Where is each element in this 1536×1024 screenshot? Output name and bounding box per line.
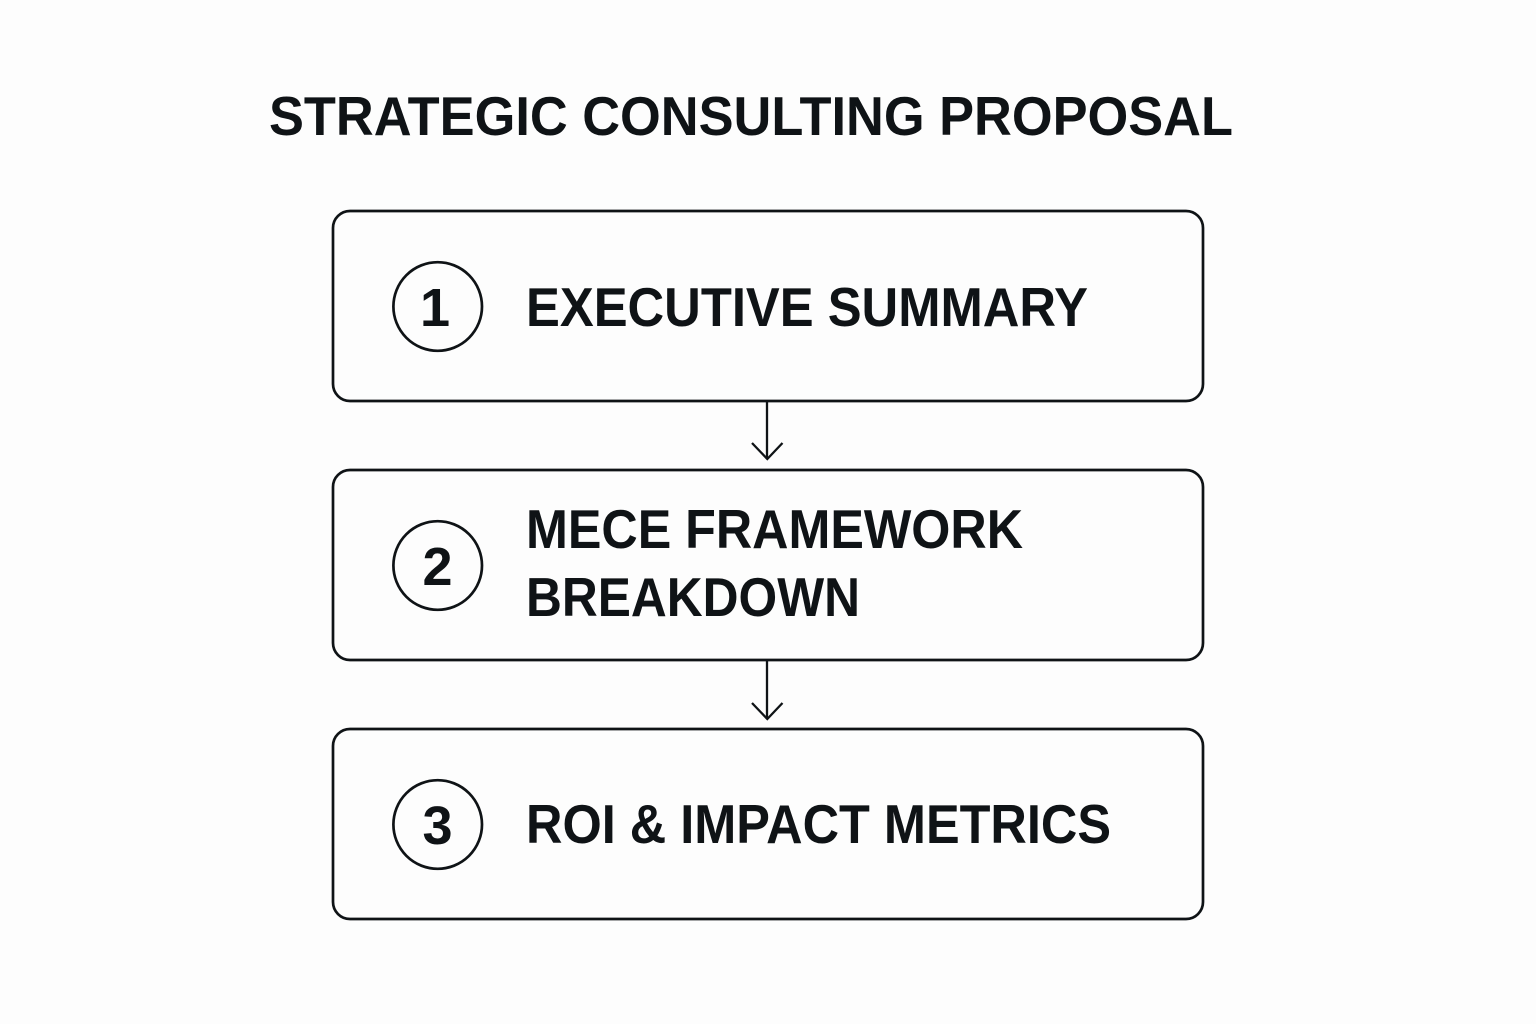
panel: executive summary [333, 211, 1203, 401]
heading: executive summary: EXECUTIVE SUMMARY [526, 276, 1088, 338]
arrow: step 1 to step 2 [752, 401, 782, 459]
heading: mece framework breakdown: MECE FRAMEWORK [526, 498, 1023, 560]
heading: mece framework breakdown [526, 498, 1023, 628]
heading: mece framework breakdown: BREAKDOWN [526, 566, 860, 628]
icon: number 2 [393, 521, 482, 610]
icon: number 1 [393, 262, 482, 351]
arrow: step 2 to step 3 [752, 660, 782, 719]
panel: roi and impact metrics [333, 729, 1203, 919]
title: STRATEGIC CONSULTING PROPOSAL [269, 85, 1233, 147]
heading: roi and impact metrics: ROI & IMPACT METRICS [526, 793, 1111, 855]
panel: mece framework breakdown [333, 470, 1203, 660]
icon: number 3: 3 [422, 796, 453, 856]
icon: number 2: 2 [422, 537, 453, 597]
icon: number 1: 1 [420, 278, 450, 338]
icon: number 3 [393, 780, 482, 869]
